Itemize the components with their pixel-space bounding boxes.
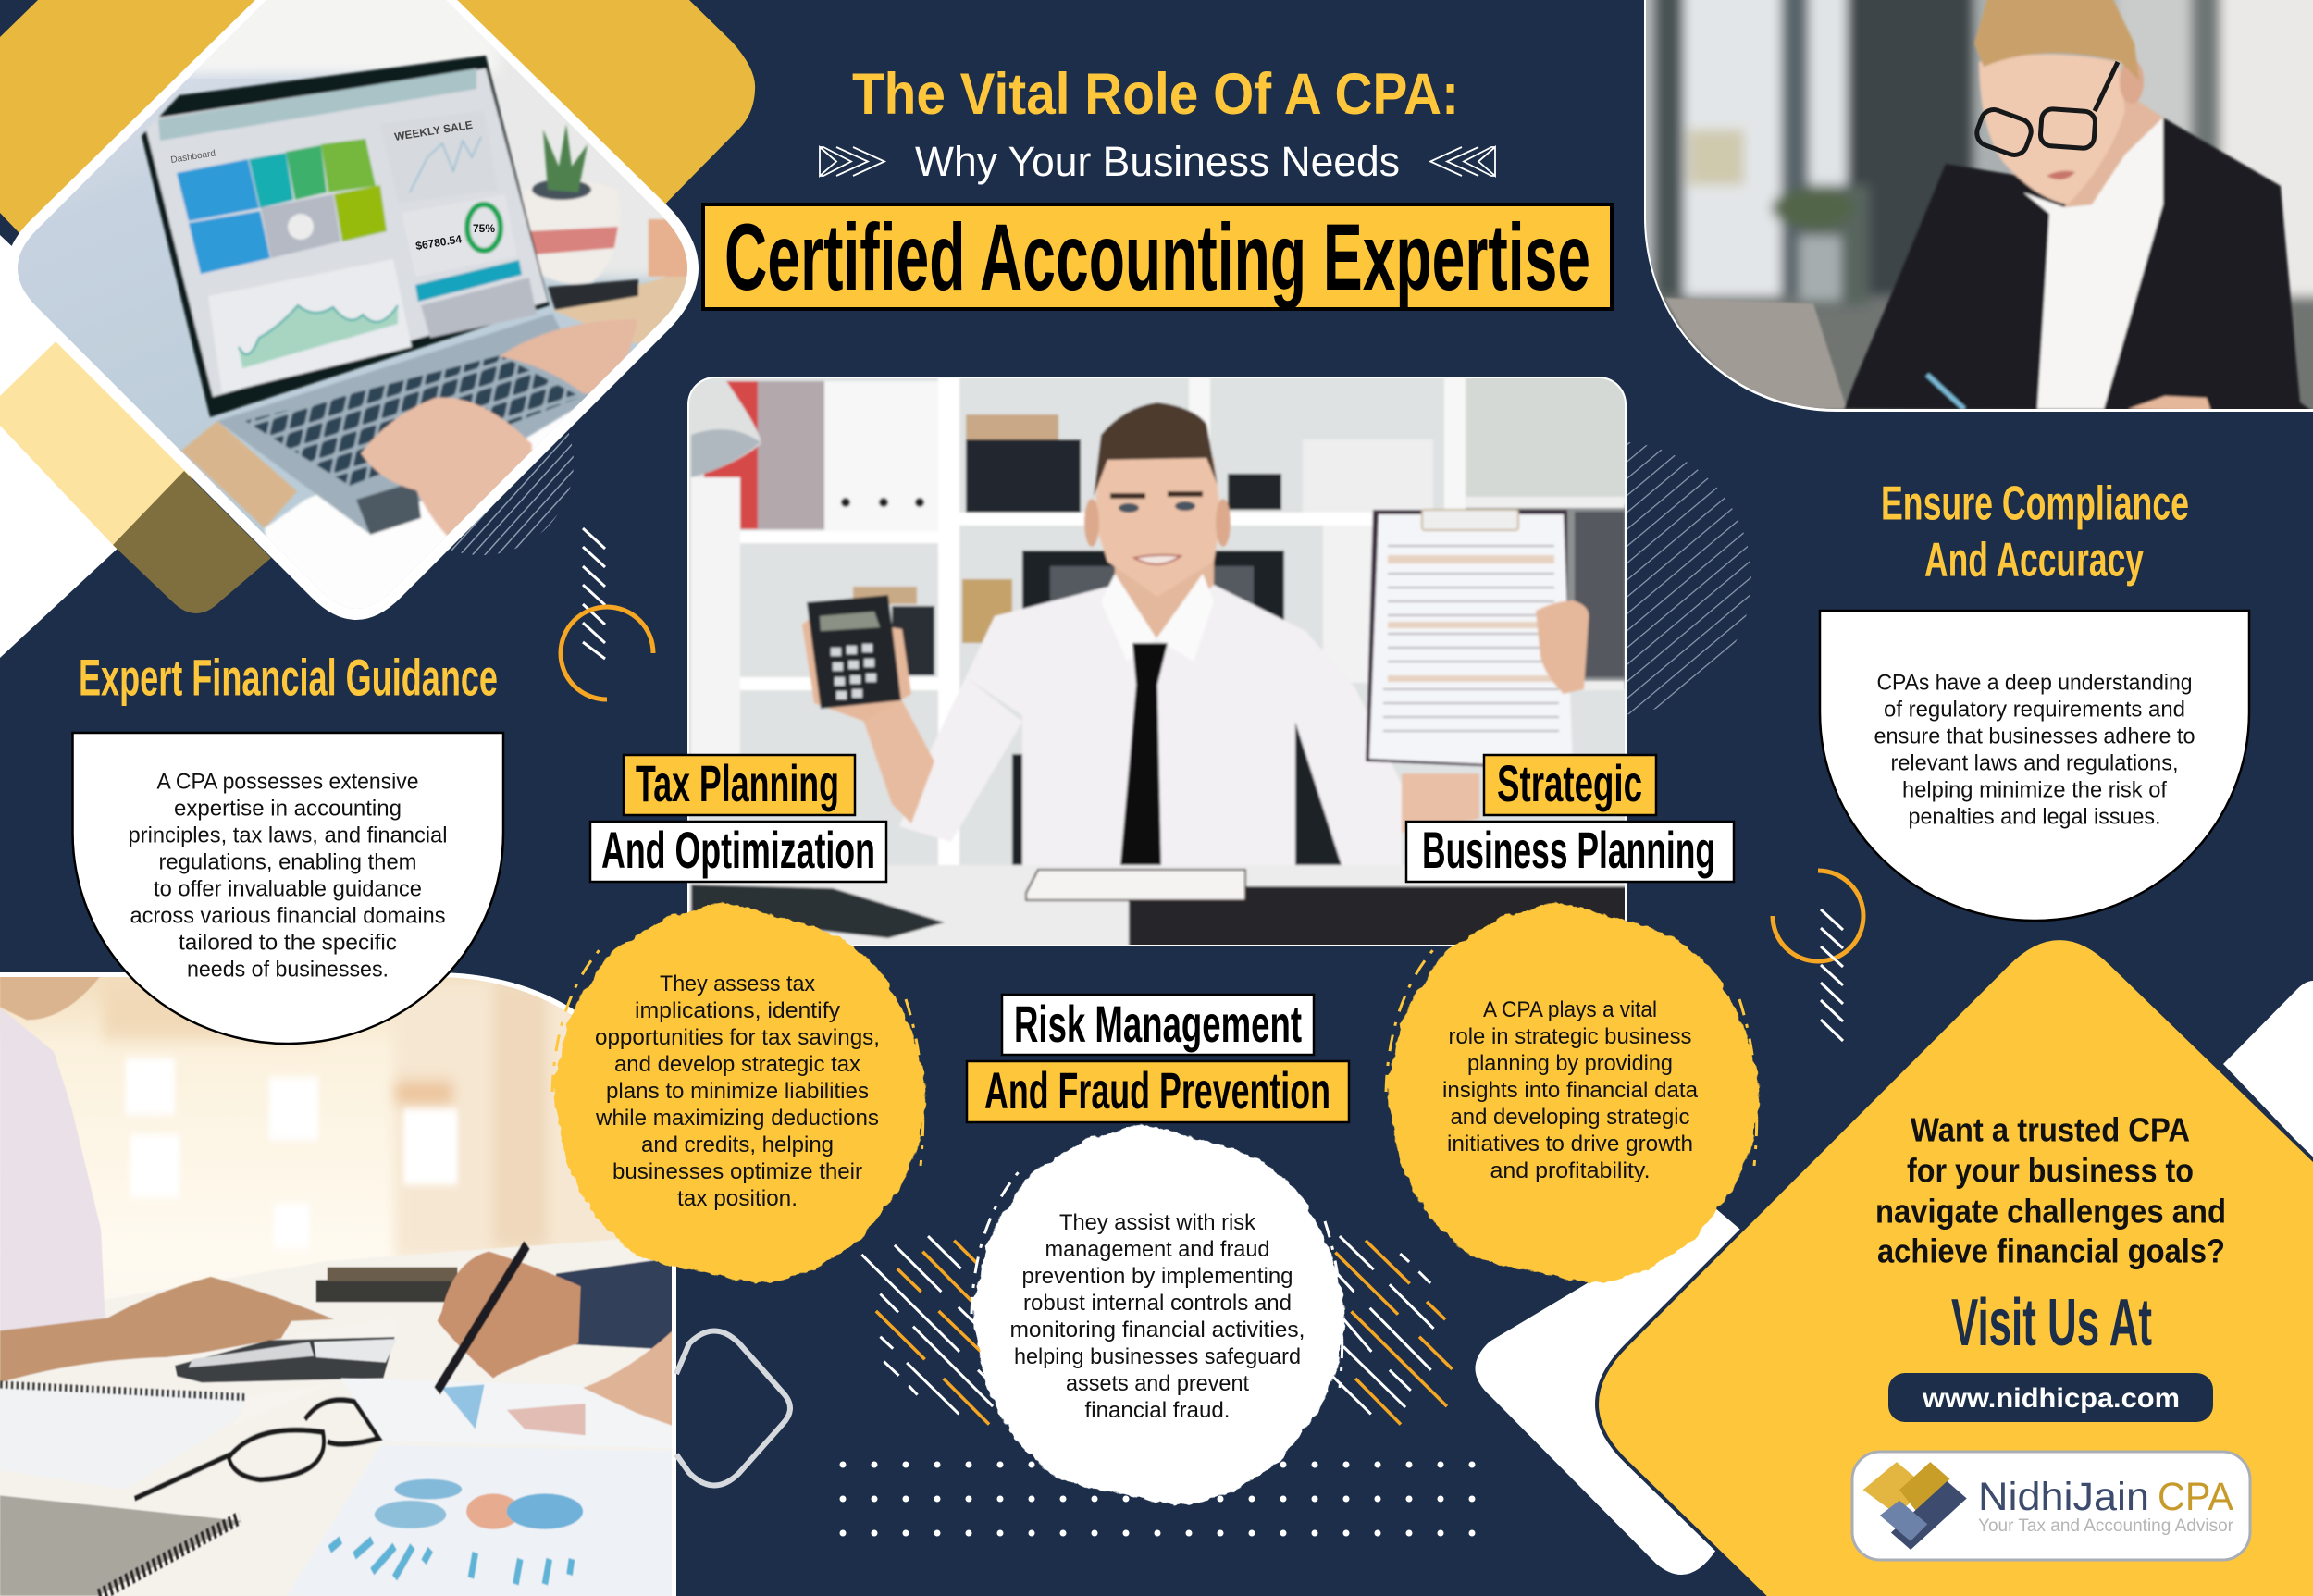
blob: tax planning: and develop strategic tax: [614, 1052, 860, 1077]
heading: expert financial guidance: Expert Financial Guidance: [79, 648, 498, 707]
heading banner: Certified Accounting Expertise: [724, 204, 1590, 310]
panel: expert financial guidance: regulations, enabling them: [159, 849, 416, 875]
label: risk management: [967, 995, 1349, 1122]
heading banner: [703, 204, 1612, 310]
label: strategic planning: Strategic: [1497, 754, 1642, 812]
photo: desk with calculator and charts: [0, 971, 676, 1596]
icon: logo mark: [1863, 1462, 1967, 1550]
panel: expert financial guidance: to offer invaluable guidance: [154, 877, 422, 901]
photo: laptop in diamond frame: [0, 0, 726, 638]
decor: white dashes near right arc: [1821, 909, 1843, 1041]
blob: tax planning: businesses optimize their: [612, 1159, 862, 1184]
panel: expert financial guidance: [72, 733, 503, 1044]
panel: expert financial guidance: principles, tax laws, and financial: [128, 823, 448, 847]
blob: strategic planning: initiatives to drive growth: [1447, 1132, 1693, 1157]
decor: grey diamond outline: [676, 1330, 790, 1486]
photo: laptop in diamond frame: 75%: [473, 222, 495, 235]
panel: ensure compliance: CPAs have a deep understanding: [1876, 670, 2193, 696]
blob: risk management: assets and prevent: [1066, 1371, 1249, 1396]
heading: ensure compliance: [1881, 477, 2189, 587]
blob: risk management: management and fraud: [1045, 1237, 1269, 1262]
decor: gold arc right: [1773, 871, 1863, 961]
blob: risk management: financial fraud.: [1084, 1398, 1231, 1423]
panel: ensure compliance: relevant laws and regulations,: [1891, 751, 2178, 775]
decor: hatched circle right of centre photo: [1478, 441, 1751, 715]
photo: woman working: [1628, 0, 2313, 426]
panel: expert financial guidance: A CPA possesses extensive: [157, 770, 418, 794]
subtitle: Why Your Business Needs: [915, 138, 1400, 185]
label: tax planning: Tax Planning: [636, 754, 839, 812]
blob: tax planning: opportunities for tax savings,: [595, 1025, 880, 1050]
blob: tax planning: plans to minimize liabilities: [606, 1079, 869, 1104]
photo: accountant with calculator and clipboard: [685, 375, 1629, 948]
decor: top gold diamonds: [0, 0, 755, 278]
panel: ensure compliance: [1820, 611, 2249, 921]
blob: risk management: helping businesses safeguard: [1014, 1344, 1301, 1369]
label: strategic planning: [1406, 754, 1734, 882]
blob: tax planning: tax position.: [677, 1186, 798, 1211]
label: strategic planning: Business Planning: [1422, 821, 1715, 879]
panel: call to action: Visit Us At: [1951, 1286, 2152, 1360]
panel: expert financial guidance: needs of businesses.: [187, 957, 389, 983]
label: tax planning: And Optimization: [601, 821, 875, 879]
panel: expert financial guidance: expertise in accounting: [174, 796, 402, 822]
logo card: [1852, 1452, 2250, 1560]
logo card: NidhiJain: [1978, 1475, 2149, 1519]
blob: tax planning: while maximizing deductions: [595, 1106, 879, 1131]
decor: hatched circle under laptop: [389, 370, 574, 555]
decor: white wedge and pale diamonds: [0, 235, 271, 658]
blob: strategic planning: A CPA plays a vital: [1483, 997, 1657, 1022]
label: risk management: And Fraud Prevention: [984, 1061, 1330, 1120]
decor: diagonal streaks: [861, 1236, 1453, 1425]
icon: left chevrons: [820, 147, 884, 176]
icon: right chevrons: [1430, 147, 1495, 176]
blob: risk management: [971, 1126, 1343, 1504]
decor: dot rows: [843, 1465, 1476, 1533]
panel: call to action: [1597, 938, 2313, 1596]
url pill: www.nidhicpa.com: [1922, 1383, 2180, 1414]
panel: ensure compliance: penalties and legal issues.: [1908, 805, 2161, 829]
panel: expert financial guidance: across various financial domains: [130, 903, 446, 929]
blob: strategic planning: insights into financial data: [1442, 1078, 1699, 1103]
blob: tax planning: implications, identify: [635, 998, 840, 1023]
panel: call to action: Want a trusted CPA: [1911, 1110, 2190, 1149]
panel: call to action: for your business to: [1907, 1151, 2194, 1190]
photo: laptop in diamond frame: WEEKLY SALE: [393, 118, 474, 143]
main title line: The Vital Role Of A CPA:: [852, 62, 1459, 127]
blob: risk management: monitoring financial activities,: [1010, 1318, 1305, 1342]
blob: risk management: prevention by implementing: [1021, 1264, 1293, 1289]
blob: risk management: robust internal controls and: [1023, 1291, 1292, 1316]
photo: laptop in diamond frame: Dashboard: [170, 148, 216, 166]
blob: tax planning: [552, 904, 924, 1282]
blob: tax planning: and credits, helping: [641, 1132, 834, 1157]
panel: call to action: navigate challenges and: [1875, 1192, 2226, 1231]
label: risk management: Risk Management: [1014, 995, 1302, 1053]
blob: strategic planning: role in strategic business: [1449, 1024, 1691, 1049]
logo card: CPA: [2158, 1475, 2233, 1519]
blob: strategic planning: planning by providing: [1467, 1051, 1673, 1076]
blob: strategic planning: and developing strategic: [1451, 1105, 1689, 1130]
heading: ensure compliance: And Accuracy: [1924, 533, 2144, 587]
decor: white dashes near left arc: [583, 528, 605, 659]
decor: gold arc left: [561, 607, 653, 699]
logo card: Your Tax and Accounting Advisor: [1978, 1516, 2234, 1536]
label: tax planning: [590, 754, 886, 882]
blob: strategic planning: [1386, 904, 1758, 1282]
panel: expert financial guidance: tailored to the specific: [179, 931, 397, 955]
panel: ensure compliance: ensure that businesses adhere to: [1874, 724, 2195, 749]
decor: white shapes behind call to action: [1475, 981, 2313, 1575]
blob: risk management: They assist with risk: [1059, 1210, 1256, 1235]
blob: strategic planning: and profitability.: [1490, 1158, 1651, 1183]
blob: tax planning: They assess tax: [660, 971, 815, 996]
panel: ensure compliance: of regulatory requirements and: [1884, 698, 2185, 722]
panel: ensure compliance: helping minimize the risk of: [1902, 777, 2167, 803]
panel: call to action: achieve financial goals?: [1877, 1232, 2225, 1269]
url pill: [1888, 1373, 2213, 1422]
photo: laptop in diamond frame: $6780.54: [414, 232, 463, 253]
